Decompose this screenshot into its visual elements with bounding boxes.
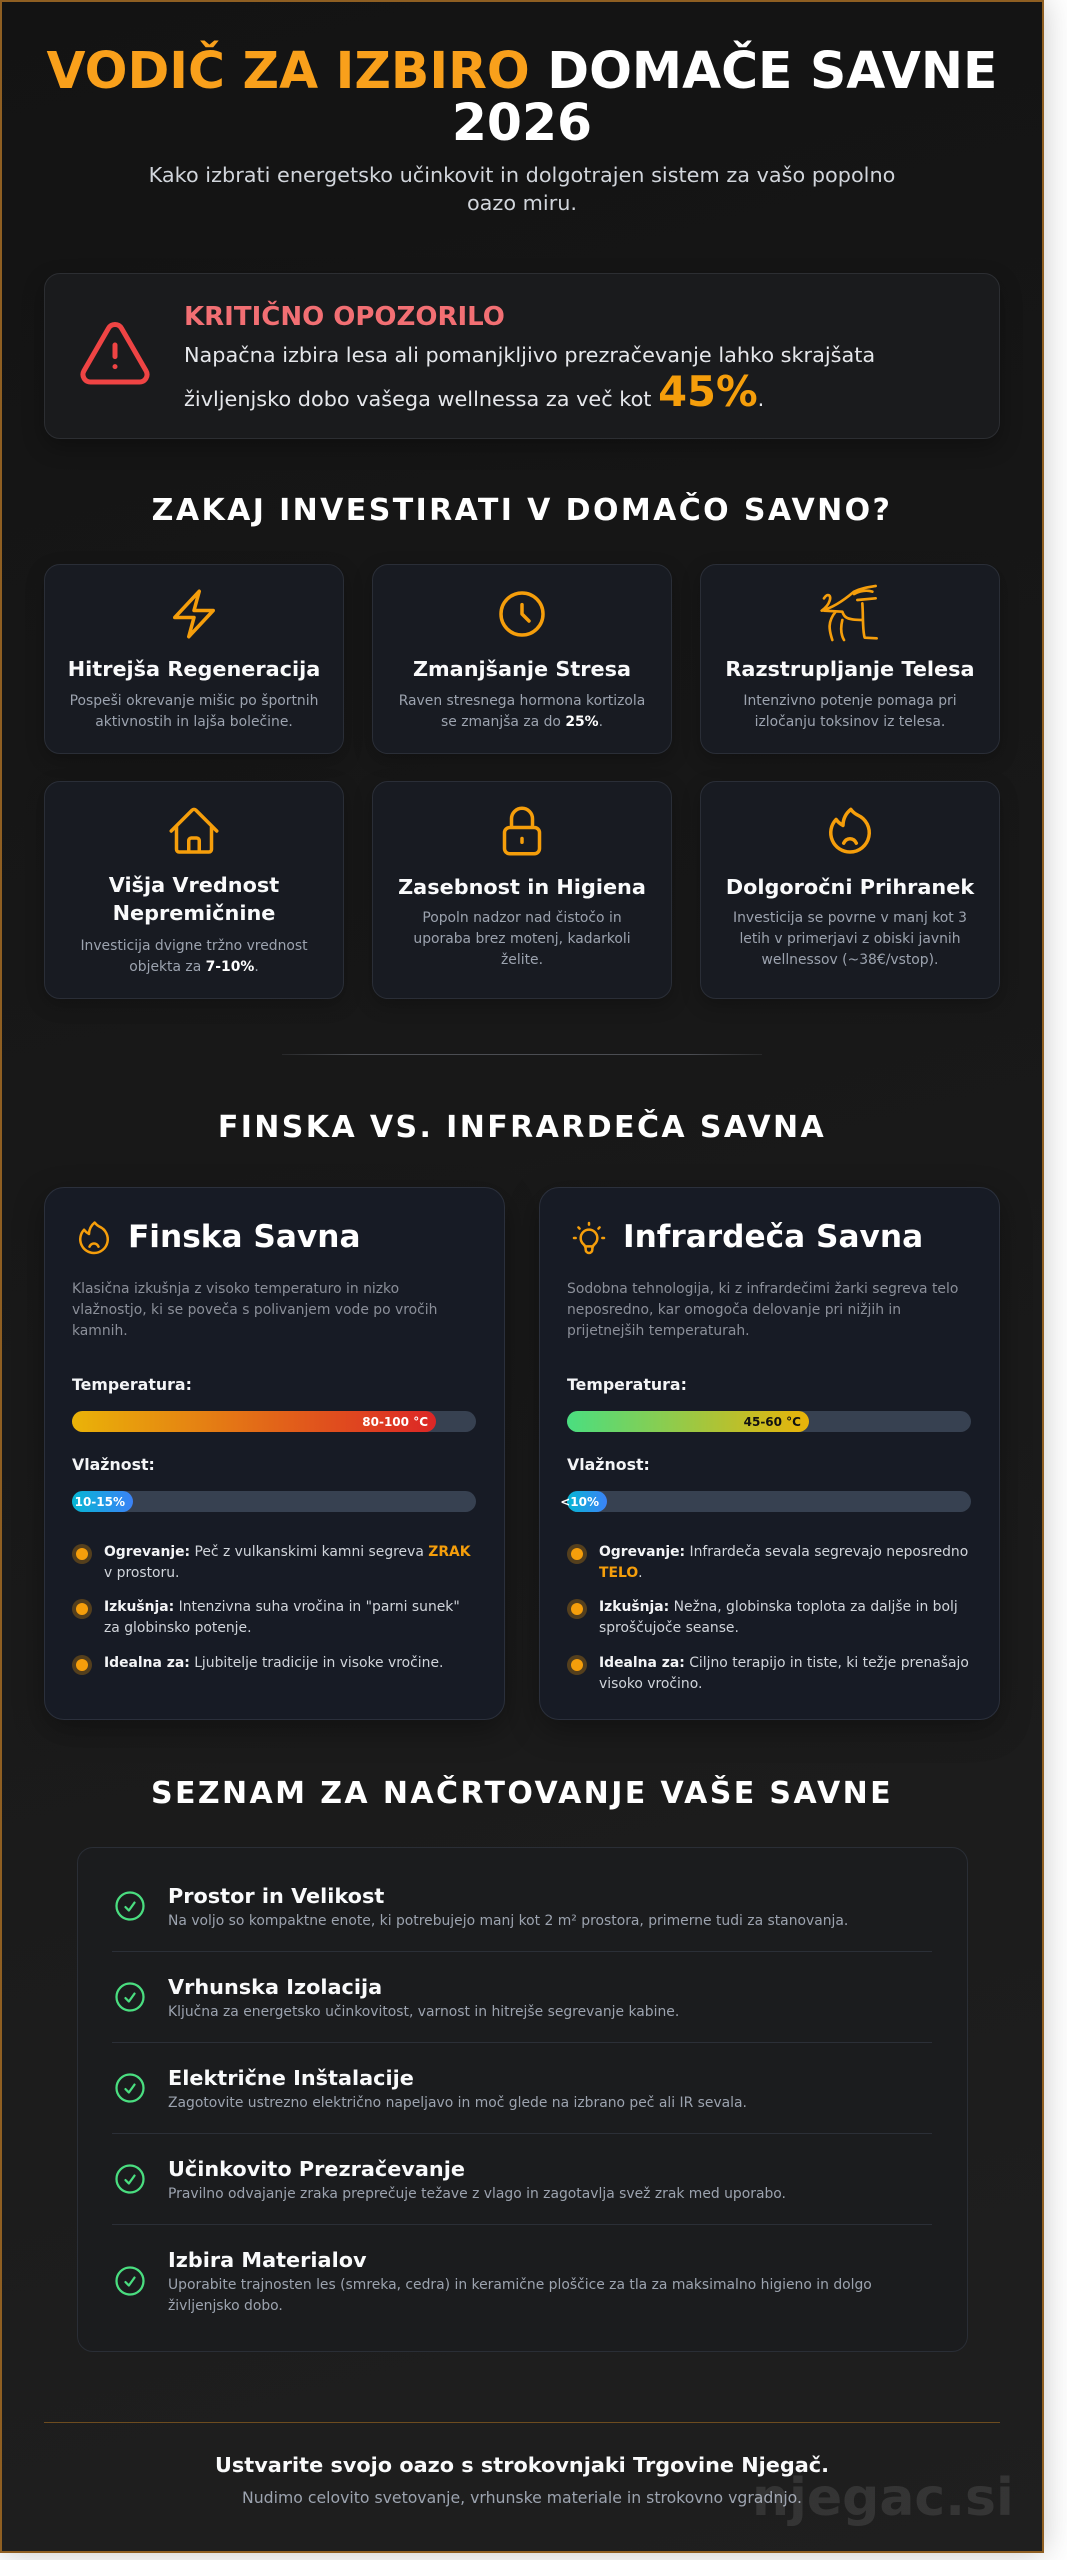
checklist item: insulation xyxy=(115,1975,679,2020)
card title: Hitrejša Regeneracija xyxy=(68,657,320,681)
panel description xyxy=(567,1281,958,1339)
card: privacy xyxy=(372,781,672,999)
card text: se zmanjša za do 25%. xyxy=(441,714,603,730)
panel: infrared sauna: Ogrevanje: Infrardeča sevala segrevajo neposredno xyxy=(599,1544,968,1560)
item text xyxy=(168,2277,872,2314)
warning text: Napačna izbira lesa ali pomanjkljivo prezračevanje lahko skrajšata xyxy=(184,343,875,367)
warning heading: KRITIČNO OPOZORILO xyxy=(184,302,505,332)
warning text xyxy=(184,343,875,416)
panel description: kamnih. xyxy=(72,1323,128,1339)
item title: Učinkovito Prezračevanje xyxy=(168,2157,465,2181)
subtitle: oazo miru. xyxy=(467,191,577,215)
icon: check xyxy=(115,2266,145,2296)
humidity bar xyxy=(567,1491,971,1512)
icon: lock xyxy=(502,806,542,856)
card text xyxy=(80,938,308,975)
heading: finnish vs infrared: FINSKA VS. INFRARDEČA SAVNA xyxy=(218,1110,826,1145)
panel: finnish sauna: za globinsko potenje. xyxy=(104,1620,252,1636)
card text: Investicija se povrne v manj kot 3 xyxy=(733,910,967,926)
card text: Investicija dvigne tržno vrednost xyxy=(80,938,308,954)
footer text: Nudimo celovito svetovanje, vrhunske materiale in strokovno vgradnjo. xyxy=(242,2488,802,2507)
panel description: vlažnostjo, ki se poveča s polivanjem vode po vročih xyxy=(72,1302,437,1318)
panel title: Infrardeča Savna xyxy=(623,1219,923,1255)
panel: finnish sauna: Izkušnja: Intenzivna suha vročina in "parni sunek" xyxy=(104,1599,460,1615)
checklist item: space xyxy=(115,1884,848,1929)
card text: Pospeši okrevanje mišic po športnih xyxy=(70,693,318,709)
subtitle xyxy=(149,163,895,215)
item title: Izbira Materialov xyxy=(168,2248,367,2272)
panel: checklist xyxy=(77,1847,968,2352)
icon: flame xyxy=(829,808,871,854)
card title: Zmanjšanje Stresa xyxy=(413,657,631,681)
panel: infrared sauna: Izkušnja: Nežna, globinska toplota za daljše in bolj xyxy=(599,1599,958,1615)
card text: Raven stresnega hormona kortizola xyxy=(399,693,645,709)
feature: ideal for xyxy=(567,1655,969,1692)
icon: check xyxy=(115,1982,145,2012)
card text xyxy=(413,910,631,968)
card text: uporaba brez motenj, kadarkoli xyxy=(413,931,631,947)
card text: izločanju toksinov iz telesa. xyxy=(755,714,945,730)
card title: Nepremičnine xyxy=(113,900,275,924)
item text: Ključna za energetsko učinkovitost, varnost in hitrejše segrevanje kabine. xyxy=(168,2004,679,2020)
icon: figure scribble xyxy=(820,584,878,642)
card: savings xyxy=(700,781,1000,999)
title: 2026 xyxy=(452,93,592,152)
panel: infrared sauna: TELO. xyxy=(599,1565,643,1581)
footer heading: Ustvarite svojo oazo s strokovnjaki Trgovine Njegač. xyxy=(215,2453,829,2477)
panel: critical warning xyxy=(44,273,1000,439)
icon: bolt xyxy=(173,589,215,639)
icon: light bulb xyxy=(572,1222,606,1254)
panel: infrared sauna xyxy=(539,1187,1000,1720)
humidity bar xyxy=(72,1491,476,1512)
temperature label: Temperatura: xyxy=(72,1375,192,1394)
panel: finnish sauna xyxy=(44,1187,505,1720)
card text: objekta za 7-10%. xyxy=(129,959,259,975)
bar fill: 80-100 C xyxy=(72,1411,436,1432)
icon: warning triangle xyxy=(80,322,150,384)
card text: aktivnostih in lajša bolečine. xyxy=(95,714,293,730)
item title: Prostor in Velikost xyxy=(168,1884,384,1908)
card: regeneration xyxy=(44,564,344,754)
item text: Uporabite trajnosten les (smreka, cedra) in keramične ploščice za tla za maksimalno higieno in dolgo xyxy=(168,2277,872,2293)
card text: želite. xyxy=(501,952,543,968)
card text xyxy=(743,693,957,730)
bar fill: 80-100 C: 80-100 °C xyxy=(362,1414,428,1428)
humidity label: Vlažnost: xyxy=(72,1455,155,1474)
bar fill: under 10%: <10% xyxy=(560,1494,599,1508)
icon: check xyxy=(115,2073,145,2103)
feature: heating xyxy=(567,1544,968,1581)
item text: življenjsko dobo. xyxy=(168,2298,283,2314)
panel: finnish sauna: Ogrevanje: Peč z vulkanskimi kamni segreva ZRAK xyxy=(104,1544,471,1560)
temperature label: Temperatura: xyxy=(567,1375,687,1394)
panel: finnish sauna: v prostoru. xyxy=(104,1565,179,1581)
bar fill: 45-60 C xyxy=(567,1411,809,1432)
card title: Zasebnost in Higiena xyxy=(398,875,646,899)
item text: Pravilno odvajanje zraka preprečuje težave z vlago in zagotavlja svež zrak med uporabo. xyxy=(168,2186,786,2202)
bar fill: 45-60 C: 45-60 °C xyxy=(744,1414,801,1428)
panel: infrared sauna: Idealna za: Ciljno terapijo in tiste, ki težje prenašajo xyxy=(599,1655,969,1671)
warning text: življenjsko dobo vašega wellnessa za več kot 45%. xyxy=(184,367,764,416)
panel description xyxy=(72,1281,437,1339)
panel title: Finska Savna xyxy=(128,1219,360,1255)
card title: Razstrupljanje Telesa xyxy=(725,657,975,681)
bar fill: 10-15% xyxy=(72,1491,133,1512)
heading: why invest: ZAKAJ INVESTIRATI V DOMAČO SAVNO? xyxy=(152,493,892,528)
card: property value xyxy=(44,781,344,999)
panel description: Sodobna tehnologija, ki z infrardečimi žarki segreva telo xyxy=(567,1281,958,1297)
icon: check xyxy=(115,2164,145,2194)
bar fill: under 10% xyxy=(567,1491,607,1512)
panel description: neposredno, kar omogoča delovanje pri nižjih in xyxy=(567,1302,901,1318)
item title: Vrhunska Izolacija xyxy=(168,1975,382,1999)
title xyxy=(46,40,997,152)
checklist item: ventilation xyxy=(115,2157,786,2202)
card: stress xyxy=(372,564,672,754)
humidity label: Vlažnost: xyxy=(567,1455,650,1474)
card text: Popoln nadzor nad čistočo in xyxy=(422,910,622,926)
section divider xyxy=(282,1054,762,1055)
icon: flame xyxy=(79,1221,109,1254)
card title xyxy=(108,873,279,924)
bar fill: 10-15%: 10-15% xyxy=(75,1494,125,1508)
subtitle: Kako izbrati energetsko učinkovit in dolgotrajen sistem za vašo popolno xyxy=(149,163,895,187)
card title: Višja Vrednost xyxy=(109,873,279,897)
card: detox xyxy=(700,564,1000,754)
temperature bar xyxy=(72,1411,476,1432)
feature: experience xyxy=(72,1599,460,1636)
title: VODIČ ZA IZBIRO DOMAČE SAVNE xyxy=(46,41,997,100)
feature: experience xyxy=(567,1599,958,1636)
watermark: njegac.si xyxy=(752,2468,1014,2528)
panel: finnish sauna: Idealna za: Ljubitelje tradicije in visoke vročine. xyxy=(104,1655,443,1671)
icon: clock xyxy=(499,591,545,637)
card text xyxy=(70,693,318,730)
panel: infrared sauna: visoko vročino. xyxy=(599,1676,702,1692)
footer divider xyxy=(44,2422,1000,2423)
card text: letih v primerjavi z obiski javnih xyxy=(739,931,961,947)
icon: house xyxy=(169,808,219,854)
temperature bar xyxy=(567,1411,971,1432)
heading: planning checklist: SEZNAM ZA NAČRTOVANJE VAŠE SAVNE xyxy=(151,1776,893,1811)
card text xyxy=(733,910,967,968)
item text: Zagotovite ustrezno električno napeljavo in moč glede na izbrano peč ali IR sevala. xyxy=(168,2095,747,2111)
icon: check xyxy=(115,1891,145,1921)
feature: heating xyxy=(72,1544,471,1581)
item title: Električne Inštalacije xyxy=(168,2066,414,2090)
card title: Dolgoročni Prihranek xyxy=(726,875,974,899)
panel description: Klasična izkušnja z visoko temperaturo in nizko xyxy=(72,1281,399,1297)
card text: Intenzivno potenje pomaga pri xyxy=(743,693,957,709)
checklist item: electrical xyxy=(115,2066,747,2111)
card text: wellnessov (~38€/vstop). xyxy=(762,952,938,968)
panel: infrared sauna: sproščujoče seanse. xyxy=(599,1620,739,1636)
card text xyxy=(399,693,645,730)
checklist item: materials xyxy=(115,2248,872,2314)
panel description: prijetnejših temperaturah. xyxy=(567,1323,750,1339)
feature: ideal for xyxy=(72,1655,443,1675)
item text: Na voljo so kompaktne enote, ki potrebujejo manj kot 2 m² prostora, primerne tudi za stanovanja. xyxy=(168,1913,848,1929)
